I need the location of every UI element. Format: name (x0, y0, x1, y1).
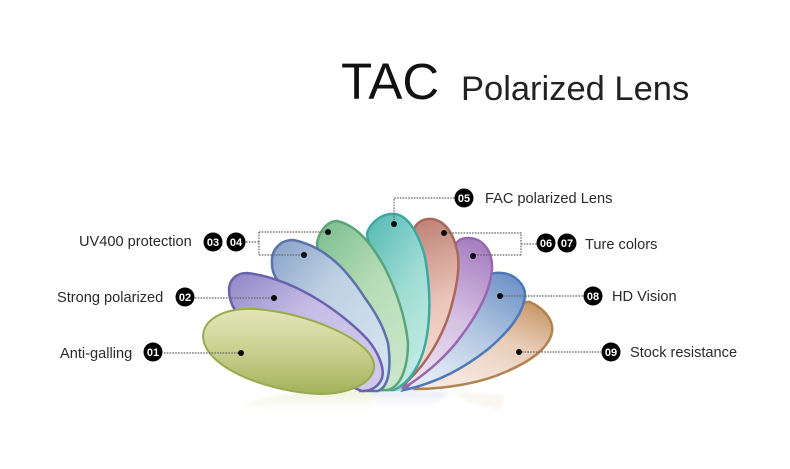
label 06 07: Ture colors: 06 (540, 238, 552, 250)
label 09: Stock resistance (602, 342, 737, 362)
label 08: HD Vision (584, 286, 677, 306)
label 03 04: UV400 protection (79, 232, 246, 252)
label 06 07: Ture colors (536, 234, 657, 253)
leader lines (164, 198, 601, 353)
lens 09: tan (416, 302, 552, 389)
label 05: FAC polarized Lens: FAC polarized Lens (485, 191, 612, 207)
label 01: Anti-galling: 01 (147, 347, 159, 359)
label 06 07: Ture colors: 07 (561, 238, 573, 250)
lens 05: teal (367, 214, 429, 390)
label 05: FAC polarized Lens: 05 (458, 193, 470, 205)
lens 06: brick (402, 219, 458, 386)
lens reflection (228, 390, 505, 416)
lens base (345, 362, 430, 391)
label 05: FAC polarized Lens (454, 188, 612, 208)
lens 08: blue (404, 273, 525, 390)
label 02: Strong polarized: Strong polarized (57, 290, 163, 306)
label 06 07: Ture colors: Ture colors (585, 237, 657, 253)
title (341, 53, 689, 110)
lens fan (203, 214, 552, 394)
label 09: Stock resistance: Stock resistance (630, 345, 737, 361)
lens 02: purple (229, 273, 383, 391)
lens 04: green (317, 221, 408, 390)
label 01: Anti-galling (60, 342, 162, 362)
lens 01: olive (203, 309, 374, 394)
label 03 04: UV400 protection: 04 (230, 237, 243, 249)
lens 03: steel blue (272, 240, 389, 391)
label 01: Anti-galling: Anti-galling (60, 346, 132, 362)
label 03 04: UV400 protection: UV400 protection (79, 234, 192, 250)
label 03 04: UV400 protection: 03 (207, 237, 219, 249)
label 08: HD Vision: 08 (587, 291, 599, 303)
title: TAC (341, 53, 439, 110)
title: Polarized Lens (461, 70, 689, 108)
anchor dots (238, 221, 522, 356)
label 02: Strong polarized (57, 288, 194, 306)
label 08: HD Vision: HD Vision (612, 289, 677, 305)
label 02: Strong polarized: 02 (179, 292, 191, 304)
lens 07: violet (402, 238, 492, 389)
label 09: Stock resistance: 09 (605, 347, 617, 359)
